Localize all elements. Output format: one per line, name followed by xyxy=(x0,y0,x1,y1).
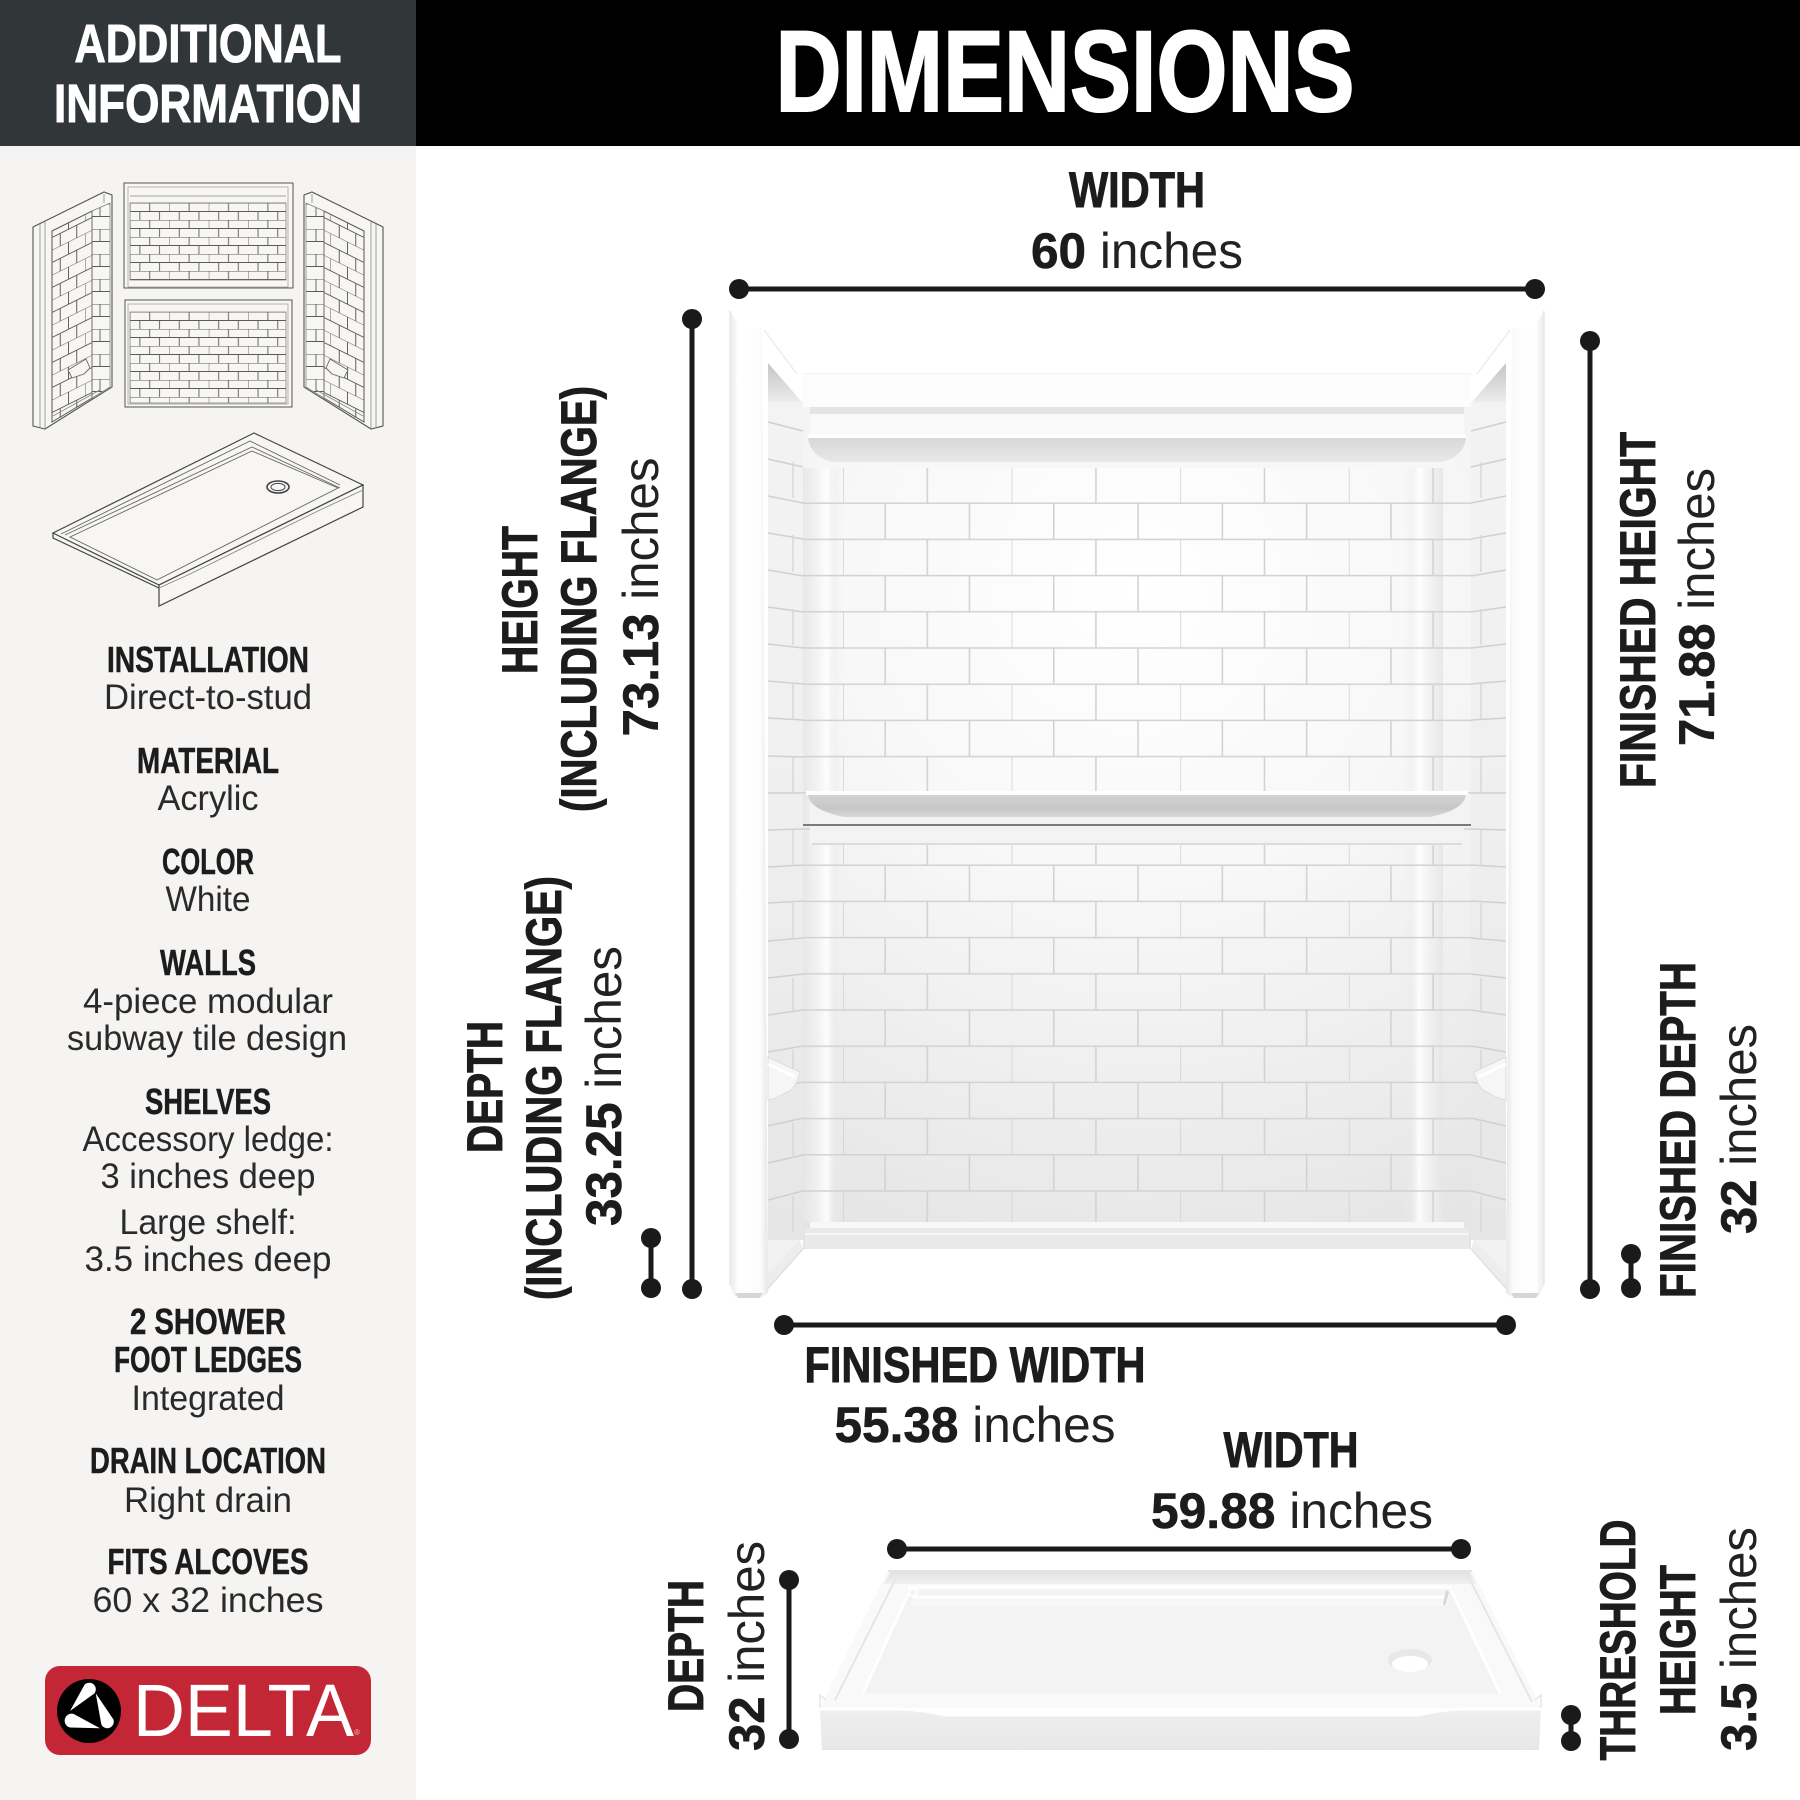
dimension: base width xyxy=(887,1422,1471,1559)
heading: additional information: ADDITIONAL xyxy=(74,14,342,74)
dimension: finished depth xyxy=(1621,962,1767,1298)
spec: walls: WALLS xyxy=(160,942,256,983)
tile grid xyxy=(803,468,1471,1222)
dimension: threshold height: 3.5 inches xyxy=(1711,1527,1767,1751)
heading: additional information xyxy=(54,14,362,134)
spec: foot ledges xyxy=(114,1301,302,1418)
spec: drain location: DRAIN LOCATION xyxy=(90,1440,326,1481)
base trim xyxy=(805,1222,1469,1249)
dimension: height including flange: (INCLUDING FLANGE) xyxy=(551,386,607,812)
dimension: height including flange: 73.13 inches xyxy=(613,458,669,736)
drain xyxy=(1388,1649,1432,1672)
heading: additional information: INFORMATION xyxy=(54,74,362,134)
spec: shelves: 3 inches deep xyxy=(100,1157,316,1196)
spec: foot ledges: Integrated xyxy=(132,1379,284,1418)
dimension: finished height xyxy=(1580,331,1725,1299)
spec: drain location: Right drain xyxy=(124,1481,292,1520)
corner shading right xyxy=(1403,468,1443,1222)
dimension: finished width: FINISHED WIDTH xyxy=(804,1337,1146,1393)
spec: walls xyxy=(67,942,347,1058)
dimension: depth including flange: 33.25 inches xyxy=(576,946,632,1226)
dimension: height including flange xyxy=(492,309,702,1299)
logo: delta xyxy=(45,1666,371,1755)
dimension: base depth xyxy=(658,1541,799,1751)
dimension: finished width xyxy=(774,1315,1516,1453)
icon: wall panels line drawing xyxy=(33,183,383,429)
spec: fits alcoves: FITS ALCOVES xyxy=(108,1541,308,1582)
dimension: depth including flange xyxy=(457,876,661,1300)
dimension: width 60 inches xyxy=(729,162,1545,299)
corner shading left xyxy=(803,468,843,1222)
heading: dimensions: DIMENSIONS xyxy=(776,8,1354,136)
shower wall photo xyxy=(730,310,1544,1298)
shower base photo xyxy=(820,1571,1541,1750)
spec: drain location xyxy=(90,1440,326,1520)
spec: walls: 4-piece modular xyxy=(83,982,333,1021)
spec: shelves: Large shelf: xyxy=(120,1203,296,1242)
logo: delta: DELTA xyxy=(133,1669,355,1752)
spec: shelves: SHELVES xyxy=(145,1081,271,1122)
dimension: finished height: 71.88 inches xyxy=(1669,468,1725,746)
dimension: threshold height xyxy=(1561,1520,1767,1760)
spec: material: MATERIAL xyxy=(137,740,279,781)
title bar: dimensions xyxy=(416,0,1800,146)
top trim xyxy=(803,373,1471,435)
dimension: finished depth: 32 inches xyxy=(1711,1024,1767,1234)
dimension: height including flange: HEIGHT xyxy=(492,526,548,674)
spec: installation: Direct-to-stud xyxy=(104,678,312,717)
spec: foot ledges: 2 SHOWER xyxy=(130,1301,286,1342)
spec: material: Acrylic xyxy=(158,779,258,818)
spec: foot ledges: FOOT LEDGES xyxy=(114,1339,302,1380)
dimension: width 60 inches: 60 inches xyxy=(1031,223,1243,279)
dimension: depth including flange: DEPTH xyxy=(457,1021,513,1153)
logo: delta: ® xyxy=(354,1728,360,1737)
spec: walls: subway tile design xyxy=(67,1019,347,1058)
spec: color: White xyxy=(166,880,250,919)
side wall left xyxy=(730,310,803,1298)
spec: color: COLOR xyxy=(162,841,254,882)
icon: shower base line drawing xyxy=(53,433,363,606)
dimension: width 60 inches: WIDTH xyxy=(1069,162,1205,218)
spec: shelves: 3.5 inches deep xyxy=(84,1240,332,1279)
dimension: threshold height: HEIGHT xyxy=(1650,1565,1706,1715)
spec: shelves: Accessory ledge: xyxy=(82,1120,334,1159)
spec: installation xyxy=(104,639,312,717)
upper accessory shelf xyxy=(808,434,1466,468)
spec: shelves xyxy=(82,1081,334,1279)
side wall right xyxy=(1471,310,1544,1298)
dimension: base depth: DEPTH xyxy=(658,1580,714,1712)
spec: fits alcoves xyxy=(92,1541,324,1620)
spec: color xyxy=(162,841,254,919)
dimension: base width: WIDTH xyxy=(1224,1422,1358,1478)
dimension: threshold height: THRESHOLD xyxy=(1590,1520,1646,1760)
dimension: finished width: 55.38 inches xyxy=(834,1397,1116,1453)
dimension: base width: 59.88 inches xyxy=(1151,1483,1433,1539)
dimension: finished height: FINISHED HEIGHT xyxy=(1610,432,1666,788)
dimension: finished depth: FINISHED DEPTH xyxy=(1650,962,1706,1298)
dimension: depth including flange: (INCLUDING FLANGE) xyxy=(516,876,572,1300)
spec: installation: INSTALLATION xyxy=(107,639,309,680)
front apron xyxy=(820,1710,1541,1750)
large shelf xyxy=(803,791,1471,845)
panel: additional information sidebar xyxy=(0,0,416,1800)
dimension: base depth: 32 inches xyxy=(719,1541,775,1751)
spec: fits alcoves: 60 x 32 inches xyxy=(92,1581,324,1620)
spec: material xyxy=(137,740,279,818)
